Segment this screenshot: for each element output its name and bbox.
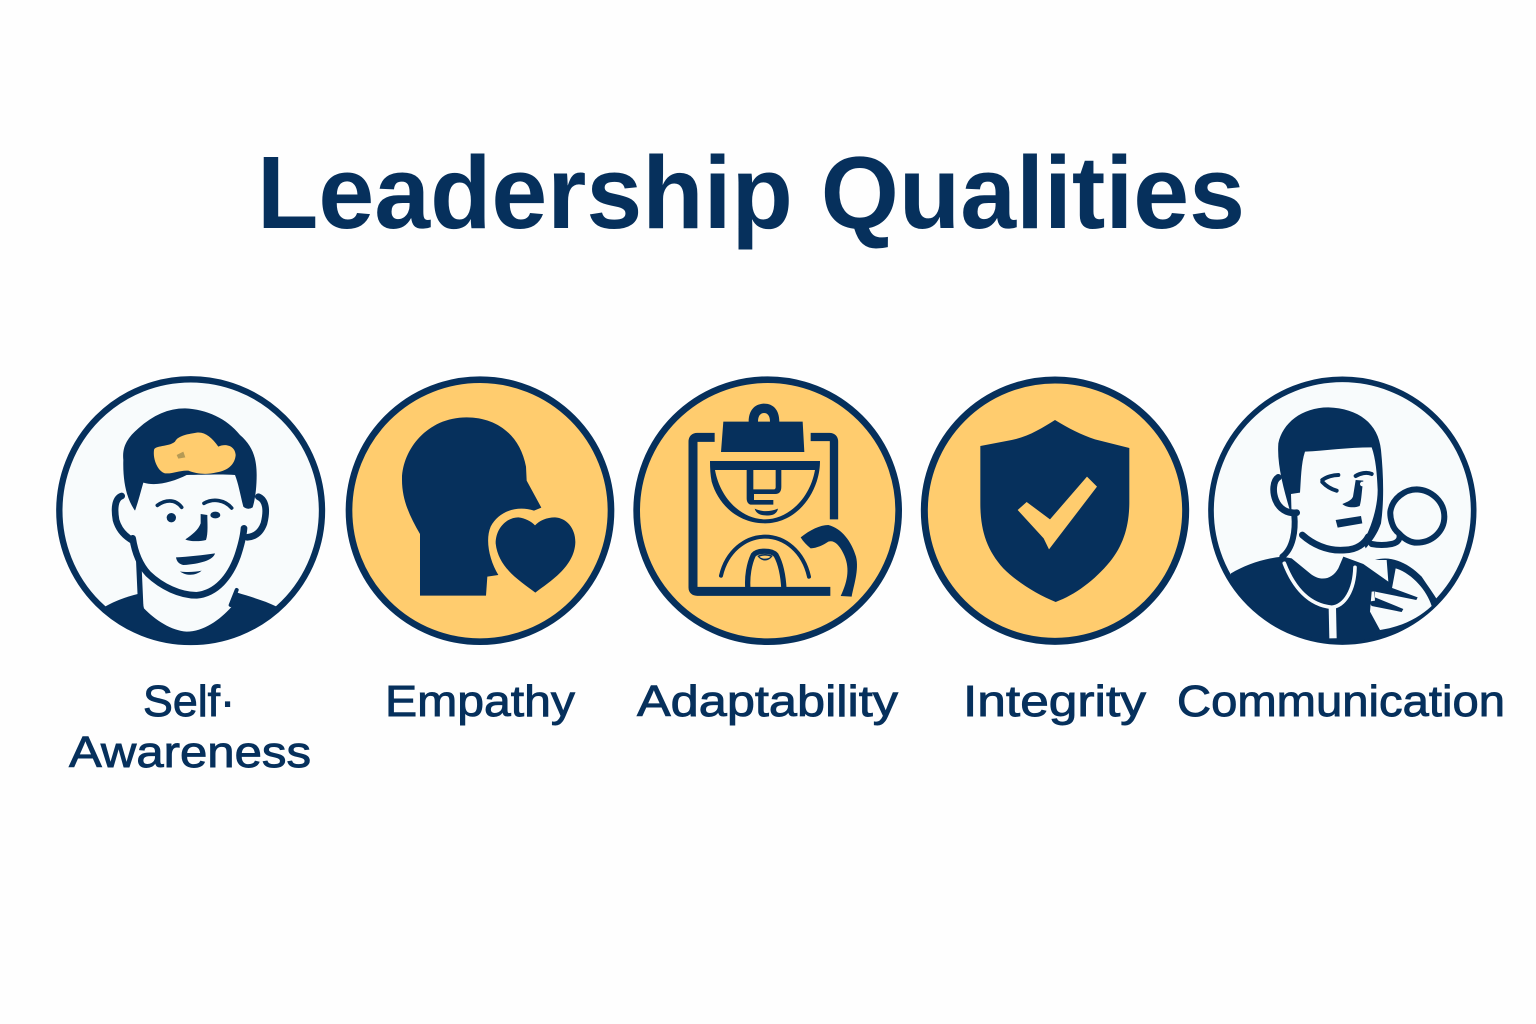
panel: adaptability	[637, 380, 899, 726]
label: self-awareness	[69, 677, 311, 777]
label: self-awareness: Awareness	[69, 728, 311, 777]
label: integrity: Integrity	[963, 677, 1146, 726]
icon: clipboard with figure	[637, 380, 899, 642]
icon: person with glowing brain	[59, 379, 322, 653]
panel: integrity	[924, 380, 1186, 726]
icon: person with speech bubble	[1211, 379, 1474, 653]
label: adaptability: Adaptability	[637, 677, 898, 726]
icon: head with heart	[349, 380, 611, 642]
label: communication: Communication	[1177, 677, 1505, 726]
icon: shield with checkmark	[924, 380, 1186, 641]
label: empathy: Empathy	[385, 677, 575, 726]
panel: empathy	[349, 380, 611, 726]
panel: communication	[1177, 379, 1505, 726]
title: Leadership Qualities	[257, 135, 1245, 250]
panel: self-awareness	[59, 379, 322, 777]
label: self-awareness: Self·	[143, 677, 235, 726]
